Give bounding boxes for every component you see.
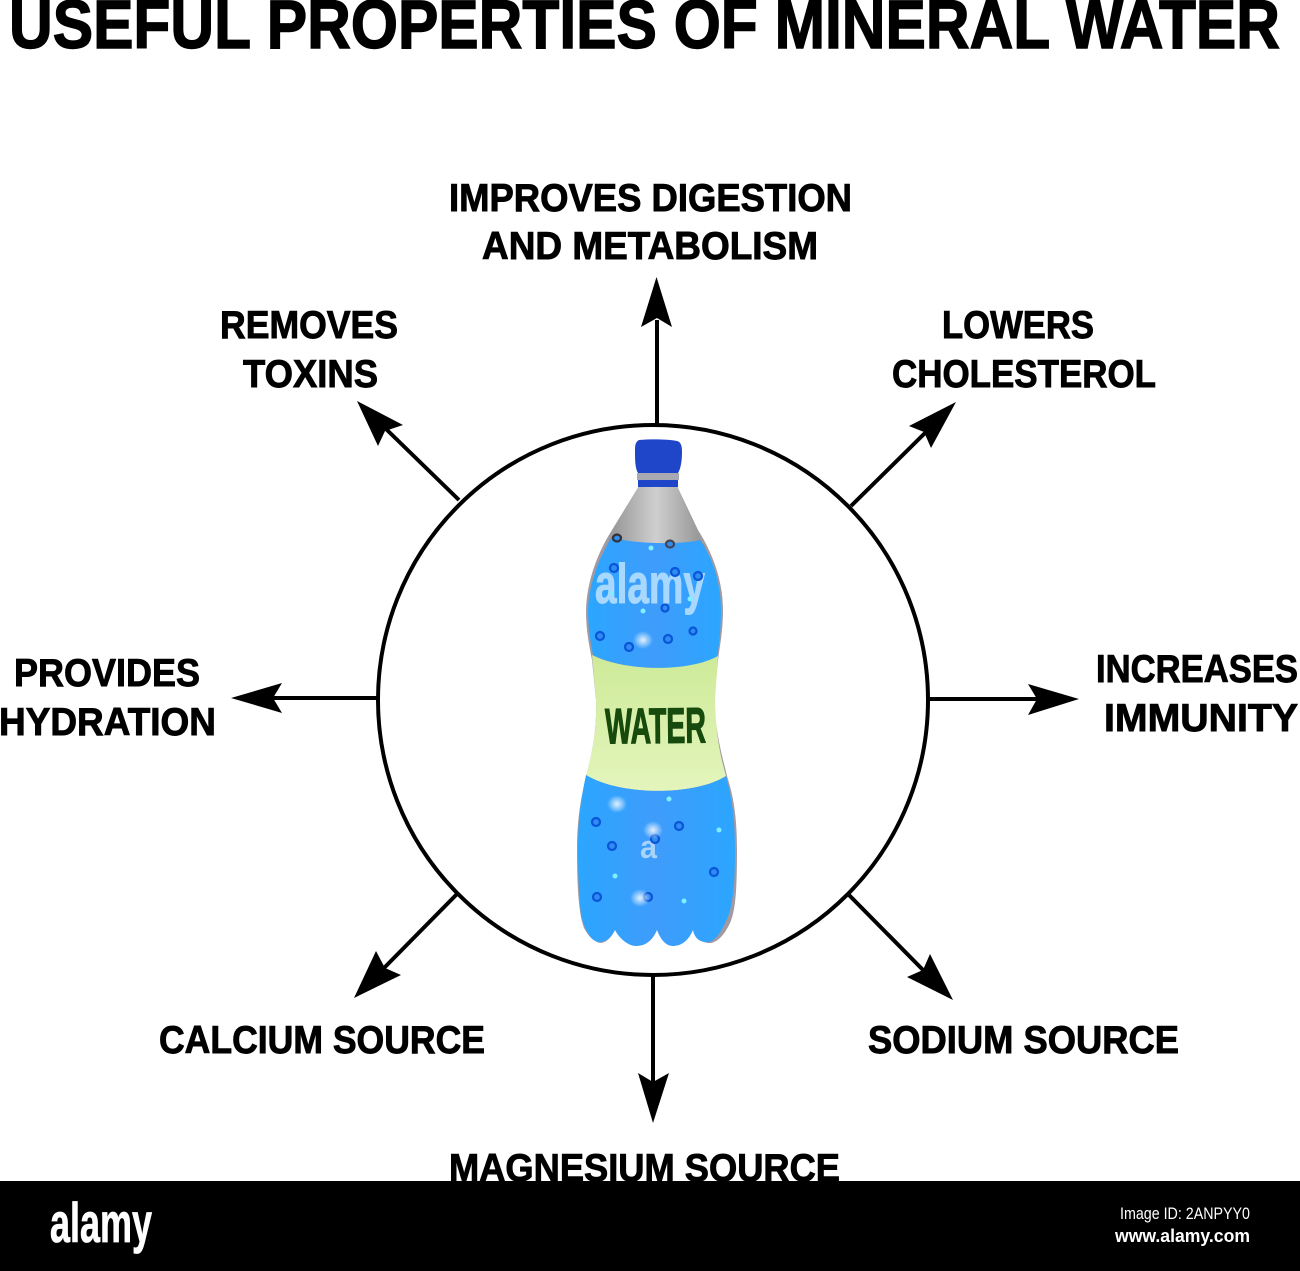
- cap silver band: [637, 473, 679, 480]
- image id: Image ID: 2ANPYY0: [1120, 1204, 1250, 1223]
- label: removes toxins: TOXINS: [243, 353, 378, 396]
- arrow: lower right to sodium: [849, 895, 953, 1000]
- upper water: [588, 537, 721, 668]
- lower water: [578, 775, 735, 946]
- bubbles: [592, 534, 718, 901]
- footer logo: alamy: [50, 1191, 152, 1254]
- central circle: [378, 425, 928, 975]
- bottle label text: WATER: [605, 697, 706, 755]
- label: removes toxins: [220, 304, 398, 396]
- glints: [607, 631, 663, 907]
- label: improves digestion: AND METABOLISM: [482, 225, 818, 268]
- arrow: right to immunity: [930, 684, 1079, 715]
- arrow: lower left to calcium: [354, 894, 457, 998]
- arrow: upper right to cholesterol: [851, 402, 956, 506]
- arrow: upper left to toxins: [357, 401, 459, 500]
- bottle shell: [577, 486, 737, 943]
- label band: [586, 655, 726, 791]
- label: lowers cholesterol: LOWERS: [942, 304, 1094, 347]
- label: improves digestion: [449, 177, 852, 268]
- label: lowers cholesterol: [892, 304, 1156, 396]
- label: removes toxins: REMOVES: [220, 304, 398, 347]
- label: calcium source: CALCIUM SOURCE: [159, 1019, 485, 1062]
- label: increases immunity: [1096, 648, 1298, 740]
- arrow: left to hydration: [231, 683, 378, 713]
- label: provides hydration: [0, 652, 216, 744]
- watermark on bottle: alamy: [595, 552, 705, 615]
- footer bar: [0, 1181, 1300, 1271]
- cap blue ring: [638, 480, 678, 487]
- watermark fragment: a: [640, 829, 657, 865]
- bottle neck: [606, 486, 706, 548]
- arrow: up to digestion: [641, 277, 672, 424]
- bottle cap: [635, 439, 682, 473]
- sparkles: [610, 546, 722, 904]
- label: provides hydration: PROVIDES: [14, 652, 200, 695]
- label: increases immunity: IMMUNITY: [1104, 697, 1298, 740]
- label: magnesium source: MAGNESIUM SOURCE: [449, 1147, 840, 1190]
- label: provides hydration: HYDRATION: [0, 701, 216, 744]
- label: sodium source: SODIUM SOURCE: [868, 1019, 1179, 1062]
- arrow: down to magnesium: [638, 976, 669, 1123]
- label: lowers cholesterol: CHOLESTEROL: [892, 353, 1156, 396]
- website: www.alamy.com: [1114, 1226, 1250, 1246]
- icon: water bottle: [577, 439, 737, 946]
- label: improves digestion: IMPROVES DIGESTION: [449, 177, 852, 220]
